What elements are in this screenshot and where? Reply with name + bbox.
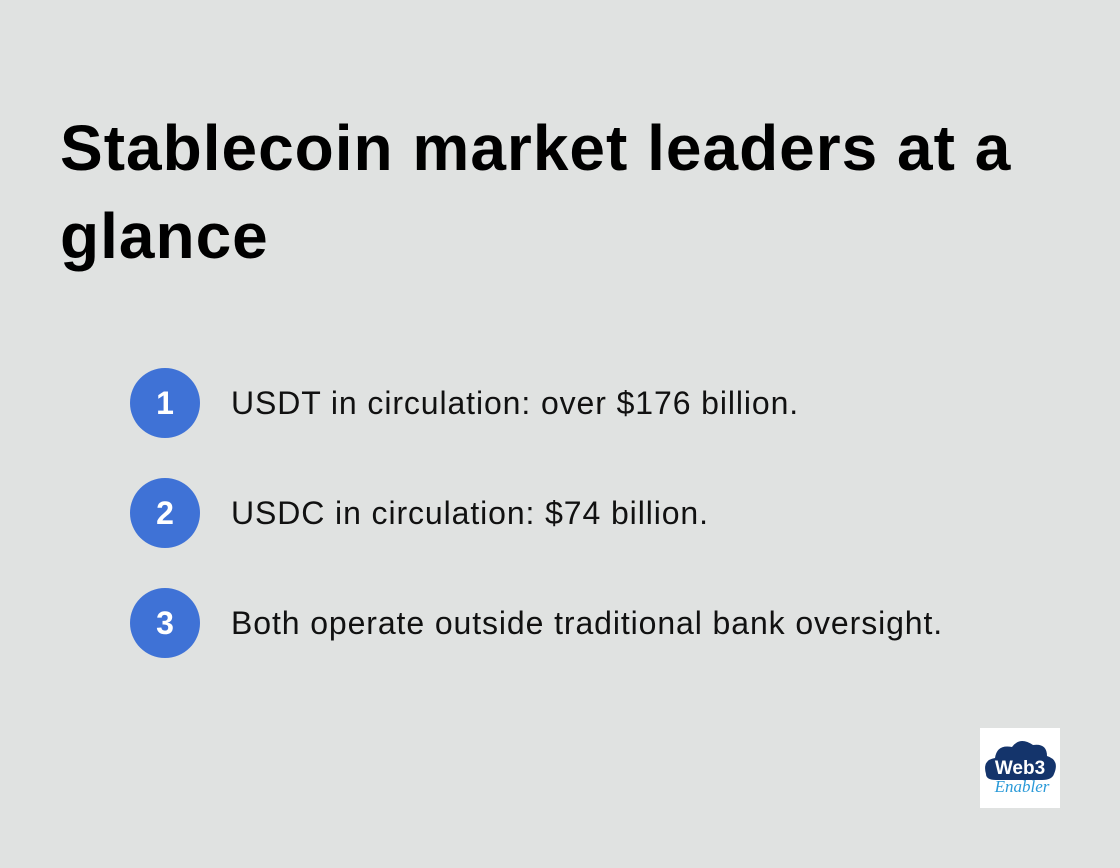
number badge 1: 1 xyxy=(156,385,174,421)
logo: Web3 Enabler xyxy=(980,728,1060,808)
number badge 2 xyxy=(130,478,200,548)
item 3 xyxy=(130,588,943,658)
logo: Web3 Enabler: Web3 xyxy=(995,758,1045,779)
item 2 xyxy=(130,478,709,548)
item text 1: USDT in circulation: over $176 billion. xyxy=(231,385,799,421)
number badge 3 xyxy=(130,588,200,658)
number badge 2: 2 xyxy=(156,495,174,531)
item text 2: USDC in circulation: $74 billion. xyxy=(231,495,709,531)
title: Stablecoin market leaders at a glance xyxy=(60,112,1011,272)
item text 3: Both operate outside traditional bank oversight. xyxy=(231,605,943,641)
item 1 xyxy=(130,368,799,438)
logo: Web3 Enabler: Enabler xyxy=(994,777,1050,796)
number badge 1 xyxy=(130,368,200,438)
number badge 3: 3 xyxy=(156,605,174,641)
